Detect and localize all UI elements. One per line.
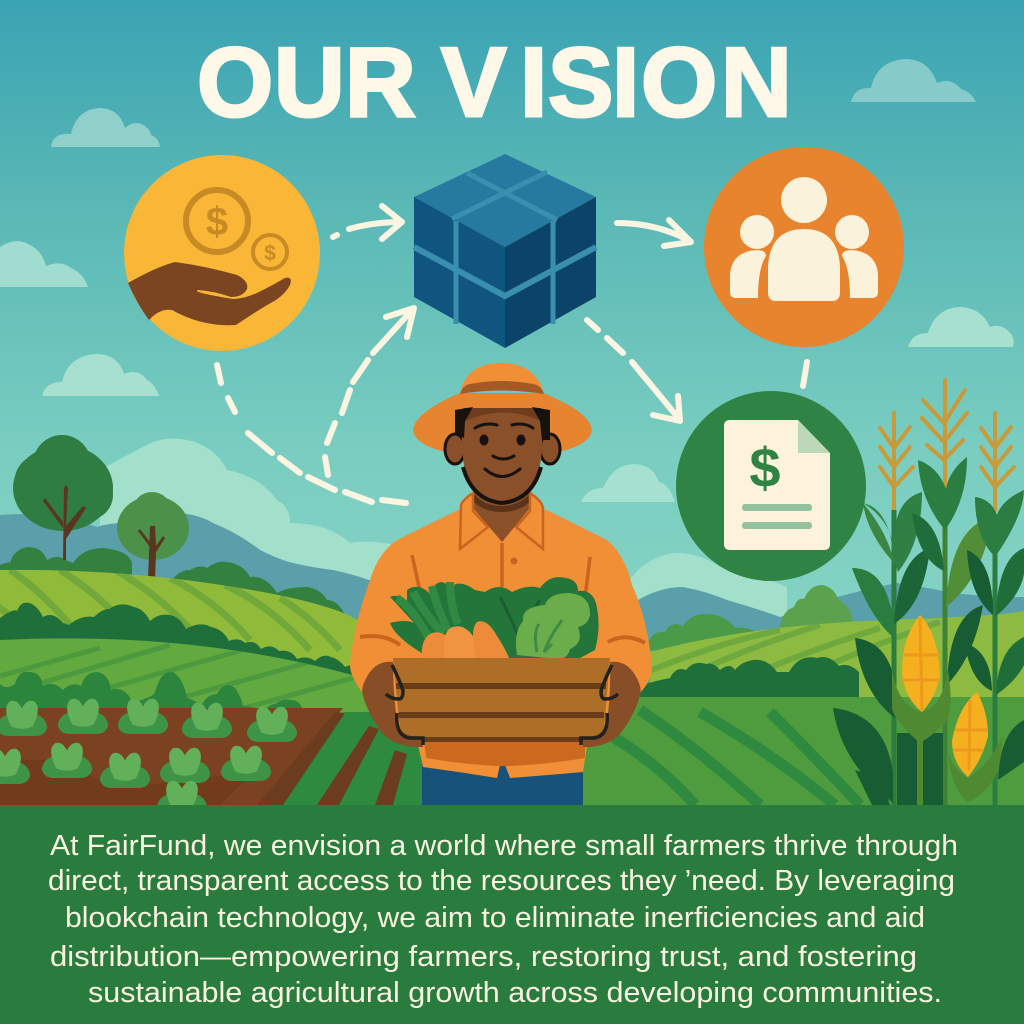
footer band [0,805,1024,1024]
icon: community [704,147,904,347]
hands [362,662,423,747]
clouds [0,59,1014,617]
farmer [350,363,652,805]
farmer face [462,408,542,503]
icon: blockchain cube [414,154,596,348]
flow diagram [124,147,904,581]
title: OUR VISION [197,27,792,137]
dashed path: hand to farmer [217,365,406,503]
footer text: blookchain technology, we aim to eliminate inerficiencies and aid [65,902,925,934]
arrow: farmer to cube [325,308,414,475]
farmer hat brim [413,393,592,452]
icon: corn plants [833,380,1024,805]
arrow: hand to cube [333,206,402,239]
trees and bushes left [0,435,350,633]
crop rows centre [257,712,565,805]
dash: document to community [803,362,807,386]
plant row left [0,672,355,740]
farmer hat crown [460,363,544,394]
corn cob large [902,615,940,712]
hill left striped [0,570,358,667]
arrow: cube to document [587,320,680,421]
vegetables [390,577,599,658]
arrow: cube to community [617,220,691,246]
shrub line left [0,603,359,691]
icon: hand with coins: $ [206,200,228,244]
footer text: sustainable agricultural growth across developing communities. [88,977,942,1009]
sky background [0,0,1024,640]
footer text: At FairFund, we envision a world where small farmers thrive through [50,830,958,862]
icon: hand with coins: $ [264,242,276,265]
right background bushes [647,585,853,656]
farmer eyes and mouth [480,434,488,446]
farmer trousers [422,760,583,805]
corn cob small [952,692,988,777]
soil patch with seedlings [0,699,343,816]
icon: dollar document [676,391,866,581]
farmer neck and collar [473,488,530,542]
farmer shirt [350,510,652,778]
field right lower [560,697,1024,805]
shrub line right [640,657,859,698]
distant hills [0,513,1024,683]
footer text: direct, transparent access to the resources they ’need. By leveraging [48,865,955,897]
farmer ears [445,434,465,464]
crate [393,658,610,740]
icon: hand with coins [124,155,320,351]
field left lower [0,638,370,713]
footer text [48,830,958,1009]
footer text: distribution—empowering farmers, restoring trust, and fostering [50,941,917,973]
right hill striped [640,610,1024,700]
icon: dollar document: $ [749,436,781,499]
